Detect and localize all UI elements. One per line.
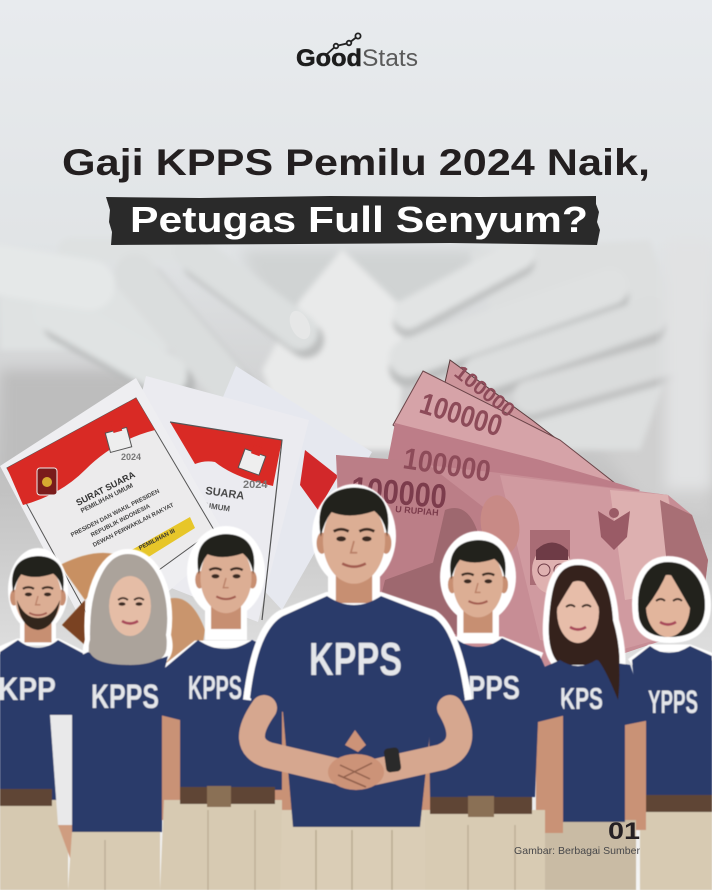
- portrait on note: [530, 530, 572, 594]
- officer 6 long hair: [538, 562, 650, 890]
- left fingernail: [286, 308, 314, 342]
- banknotes: U RUPIAH: [395, 504, 439, 518]
- shirt: [0, 640, 88, 800]
- officer 1: [0, 548, 90, 890]
- left hand: [0, 250, 306, 392]
- head: [440, 531, 516, 643]
- hijab: [86, 552, 170, 668]
- officer 7 bob hair: [630, 559, 712, 890]
- head: [8, 548, 68, 644]
- shirt: [160, 640, 282, 790]
- ballot 1 front: 2024: [121, 452, 141, 462]
- banknotes: 100000: [416, 387, 506, 443]
- officer 4 center: [247, 484, 468, 890]
- face: [646, 568, 690, 637]
- officer 3: [158, 526, 294, 890]
- right side backdrop: [665, 240, 712, 490]
- banknotes: 100000: [401, 442, 493, 489]
- pants crease: [316, 830, 392, 890]
- shoulder outline: [0, 642, 90, 658]
- shirt: [538, 660, 650, 822]
- group of KPPS officers: [0, 484, 712, 890]
- banknotes: 100000: [349, 470, 448, 516]
- pants: [640, 805, 712, 890]
- logo wordmark second part: Stats: [362, 45, 418, 72]
- face: [109, 576, 151, 636]
- title highlight: [106, 196, 600, 245]
- pants: [420, 810, 545, 890]
- logo wordmark: Good: [296, 45, 362, 72]
- officer 5: [415, 531, 566, 890]
- belt: [180, 787, 275, 804]
- hijab front: [89, 554, 167, 665]
- arm: [622, 720, 646, 830]
- head: [312, 484, 396, 605]
- shirt text: PPS: [468, 669, 520, 706]
- pants: [545, 820, 636, 890]
- shirt text: KPPS: [91, 678, 159, 716]
- ballot 1 front: REPUBLIK INDONESIA: [90, 503, 152, 539]
- garuda emblem: [598, 508, 630, 550]
- ballot 1 front: SURAT SUARA: [74, 469, 137, 508]
- ballot 1 front: [0, 378, 228, 652]
- hand: [58, 825, 95, 885]
- ballots: [0, 366, 372, 690]
- hair fall: [598, 610, 620, 700]
- head: [187, 526, 265, 640]
- shirt: [250, 596, 465, 827]
- ballot 2 middle: 2024: [243, 479, 268, 491]
- pants: [68, 832, 160, 890]
- dark shadows on notes: [370, 508, 480, 640]
- hair: [546, 562, 623, 680]
- ballot 1 front: PEMILIHAN UMUM: [80, 482, 134, 515]
- ballot 2 middle: [100, 376, 309, 636]
- envelope: [262, 249, 450, 450]
- white sleeve arm: [50, 715, 80, 825]
- arms: [252, 708, 459, 772]
- ballot 1 front: DEWAN PERWAKILAN RAKYAT: [92, 502, 175, 549]
- page number: 01: [608, 818, 640, 845]
- belt: [642, 795, 712, 812]
- thumb on notes: [476, 492, 524, 558]
- pants: [280, 810, 425, 890]
- logo chart line: [327, 33, 361, 54]
- ballot 1 front: PRESIDEN DAN WAKIL PRESIDEN: [70, 489, 161, 539]
- shirt text: KPPS: [188, 669, 242, 706]
- shirt text: KPS: [560, 681, 603, 716]
- banknotes: [336, 360, 708, 700]
- title line 1: Gaji KPPS Pemilu 2024 Naik,: [62, 142, 650, 183]
- wristwatch: [383, 747, 402, 773]
- note value text: 100000: [450, 362, 519, 422]
- ballot 2 middle: UMUM: [205, 501, 231, 513]
- head: [635, 559, 708, 640]
- shirt: [632, 646, 712, 805]
- right hand: [408, 240, 680, 450]
- pants crease: [104, 840, 106, 890]
- shoulder outline: [247, 596, 468, 700]
- clasped hands: [328, 730, 384, 790]
- arms: [161, 705, 294, 830]
- image credit: Gambar: Berbagai Sumber: [514, 845, 640, 857]
- shoulder outline: [630, 648, 712, 662]
- belt: [430, 797, 532, 814]
- face: [556, 572, 600, 643]
- pants: [160, 800, 282, 890]
- arms: [415, 710, 563, 833]
- torn black tape: [106, 196, 600, 245]
- shirt: [50, 652, 168, 832]
- pants: [0, 800, 68, 890]
- ballot 1 front: PEMILIHAN III: [138, 528, 177, 552]
- GoodStats logo: [296, 33, 418, 72]
- belt: [0, 789, 52, 806]
- pants crease: [468, 825, 515, 890]
- shirt: [428, 638, 566, 797]
- shoulder outline: [426, 640, 542, 656]
- title line 2: Petugas Full Senyum?: [130, 199, 588, 240]
- ballot 3 back: [180, 366, 372, 610]
- pants crease: [208, 810, 255, 890]
- backdrop shading behind hands: [0, 250, 712, 520]
- shirt text: KPPS: [309, 633, 402, 685]
- ballot 2 middle: SUARA: [205, 485, 245, 502]
- shoulder outline: [158, 644, 284, 674]
- officer 2 hijab: [50, 552, 170, 890]
- hand holding ballots: [60, 553, 205, 690]
